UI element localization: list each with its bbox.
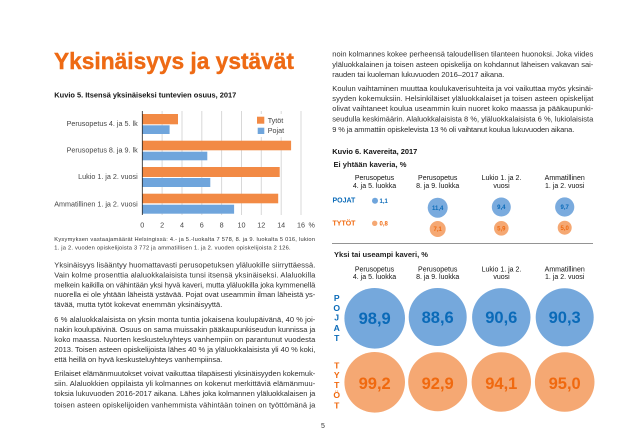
bar chart: lonely share: 4 xyxy=(180,220,184,229)
row label: boys vertical: A xyxy=(334,323,340,333)
column headers: no friends: Perusopetus xyxy=(355,175,395,182)
column headers: one or more friends: 1. ja 2. vuosi xyxy=(545,274,585,281)
row: boys, one or more friends: 98,9 xyxy=(359,310,391,328)
bar chart: lonely share: 10 xyxy=(238,220,246,229)
bar chart: lonely share xyxy=(54,111,315,229)
column headers: no friends: Lukio 1. ja 2. xyxy=(482,175,521,182)
column headers: one or more friends: Perusopetus xyxy=(418,266,458,274)
column headers: no friends: 4. ja 5. luokka xyxy=(353,183,396,190)
column headers: one or more friends: Perusopetus xyxy=(355,266,395,274)
body text: right paragraph 1: rauden tai kuoleman lukuvuoden 2016–2017 aikana. xyxy=(332,70,504,79)
row: girls, one or more friends: 92,9 xyxy=(422,375,454,393)
body text: left paragraph 3 xyxy=(54,369,316,409)
bar chart: lonely share: Lukio 1. ja 2. vuosi xyxy=(78,172,138,181)
row: girls, no friends xyxy=(332,218,572,237)
column headers: no friends xyxy=(353,175,585,190)
column headers: no friends: 1. ja 2. vuosi xyxy=(545,183,585,190)
bar chart: lonely share: Perusopetus 4. ja 5. lk xyxy=(67,119,138,128)
legend: Tytöt xyxy=(268,116,283,125)
legend xyxy=(257,116,284,135)
chart heading: Kuvio 5. Itsensä yksinäiseksi tuntevien osuus, 2017 xyxy=(54,90,236,100)
column headers: one or more friends: 8. ja 9. luokka xyxy=(416,274,459,281)
row label: girls vertical: Y xyxy=(334,370,340,380)
column headers: no friends: Perusopetus xyxy=(418,175,458,182)
row label: girls vertical: T xyxy=(334,380,340,390)
body text: left paragraph 3: Erilaiset elämänmuutokset voivat vaikuttaa tilapäisesti yksinäisyyden kokemuk- xyxy=(54,369,316,378)
row label: girls vertical: T xyxy=(334,400,340,410)
row: boys, one or more friends xyxy=(344,288,594,349)
bar chart: lonely share: 0 xyxy=(140,220,144,229)
body text: left paragraph 1: Yksinäisyys lisääntyy huomattavasti perusopetuksen yläluokille siirryttäessä. xyxy=(54,261,315,270)
figure 6 heading: Kuvio 6. Kavereita, 2017 xyxy=(332,147,417,156)
row: girls, one or more friends: 99,2 xyxy=(359,375,391,393)
body text: left paragraph 2: 6 % alaluokkalaisista on yksin monta tuntia jokaisena koulupäivänä, 40 % joi- xyxy=(54,315,316,324)
row: girls, no friends: 7,1 xyxy=(434,227,443,233)
column headers: no friends: 8. ja 9. luokka xyxy=(416,183,459,190)
column headers: one or more friends: 4. ja 5. luokka xyxy=(353,274,396,281)
body text: left paragraph 3: toisen asteen opiskelijoiden vanhemmista vähintään toinen on työttömänä ja xyxy=(54,400,316,409)
row: boys, one or more friends: 90,6 xyxy=(485,309,517,327)
row: girls, one or more friends: 94,1 xyxy=(485,375,517,393)
bar chart: lonely share: Perusopetus 8. ja 9. lk xyxy=(67,146,138,154)
bar chart: lonely share: Ammatillinen 1. ja 2. vuosi xyxy=(54,200,138,208)
chart footnote: Kysymyksen vastaajamäärät Helsingissä: 4.- ja 5.-luokalta 7 578, 8. ja 9. luokalta 5 016, lukion xyxy=(54,237,315,243)
page number: 5 xyxy=(321,423,325,430)
bar chart: lonely share: 2 xyxy=(160,220,164,229)
body text: right paragraph 1 xyxy=(332,50,594,79)
body text: left paragraph 2: että heillä on hyvä keskusteluyhteys vanhempiinsa. xyxy=(54,355,222,364)
body text: left paragraph 1 xyxy=(54,261,316,309)
body text: right paragraph 2: Koulun vaihtaminen muuttaa koulukaverisuhteita ja voi vaikuttaa myös yksinäi- xyxy=(332,84,594,93)
body text: left paragraph 1: nuorella ei ole yhtään läheistä ystävää. Pojat ovat useammin ilman läheistä ys- xyxy=(54,290,316,299)
row: girls, no friends: 5,9 xyxy=(497,226,506,232)
chart footnote xyxy=(54,237,315,252)
column headers: one or more friends: vuosi xyxy=(493,274,510,281)
body text: left paragraph 1: Vain kolme prosenttia alaluokkalaisista tunsi itsensä yksinäiseksi. Alaluokilla xyxy=(54,270,316,280)
row: girls, no friends: TYTÖT xyxy=(332,218,356,228)
body text: right paragraph 2: syyden kokemuksiin. Helsinkiläiset yläluokkalaiset ja toisen asteen opiskelijat xyxy=(332,94,594,103)
row: boys, one or more friends: 90,3 xyxy=(549,309,581,327)
row: boys, no friends: 11,4 xyxy=(432,206,444,212)
row label: girls vertical: Ö xyxy=(333,390,340,400)
subheading: one or more friends: Yksi tai useampi kaveri, % xyxy=(334,252,429,259)
body text: right paragraph 2: 9 % ja ammattiin opiskelevista 13 % oli vaihtanut koulua lukuvuoden aikana. xyxy=(332,125,574,134)
bar chart: lonely share: 6 xyxy=(200,220,204,229)
body text: right paragraph 2 xyxy=(332,84,594,134)
body text: left paragraph 2: 2013. Toisen asteen opiskelijoista lähes 40 % ja yläluokkalaisista yli 40 % koki, xyxy=(54,345,315,354)
row label: boys vertical: P xyxy=(334,293,340,303)
column headers: one or more friends: Ammatillinen xyxy=(545,266,585,274)
row label: boys vertical: T xyxy=(334,333,340,343)
legend: Pojat xyxy=(268,126,284,135)
bar chart: lonely share: 16 xyxy=(297,220,305,229)
row: boys, one or more friends: 88,6 xyxy=(422,309,454,327)
subheading: no friends: Ei yhtään kaveria, % xyxy=(334,162,407,169)
body text: left paragraph 3: toksia lukuvuoden 2016-2017 aikana. Lähes joka kolmannen yläluokkalaisen ja xyxy=(54,389,316,398)
chart footnote: 1. ja 2. vuoden opiskelijoista 3 772 ja ammatillisen 1. ja 2. vuoden opiskelijoista 2 126. xyxy=(54,246,291,252)
row: boys, no friends: POJAT xyxy=(332,198,356,204)
row label: boys vertical: J xyxy=(334,312,339,322)
body text: left paragraph 3: siin. Alaluokkien oppilaista yli kolmannes on kokenut merkittäviä elämänmuu- xyxy=(54,379,316,388)
body text: right paragraph 1: noin kolmannes kokee perheensä taloudellisen tilanteen huonoksi. Joka viides xyxy=(332,50,594,59)
bar chart: lonely share: % xyxy=(308,220,315,229)
row: boys, no friends xyxy=(332,197,574,218)
row: girls, no friends: 0,8 xyxy=(380,222,389,228)
bar chart: lonely share: 12 xyxy=(257,220,265,229)
row label: boys vertical xyxy=(333,293,340,343)
row label: boys vertical: O xyxy=(333,303,340,313)
column headers: one or more friends xyxy=(353,266,585,281)
bar chart: lonely share: 14 xyxy=(277,220,285,229)
title: Yksinäisyys ja ystävät xyxy=(54,48,294,74)
row: boys, no friends: 1,1 xyxy=(380,199,389,205)
column headers: no friends: vuosi xyxy=(493,183,510,190)
row: girls, one or more friends: 95,0 xyxy=(549,375,581,393)
body text: left paragraph 2: koko maassa. Nuorten keskusteluyhteys vanhempiin on parantunut vuodesta xyxy=(54,335,316,344)
row: boys, no friends: 9,7 xyxy=(561,205,570,211)
row label: girls vertical: T xyxy=(334,360,340,370)
body text: right paragraph 1: yläluokkalainen ja toisen asteen opiskelija on kohdannut läheisen vakavan sai- xyxy=(332,60,594,69)
row: girls, no friends: 5,0 xyxy=(561,226,570,232)
row label: girls vertical xyxy=(333,360,340,410)
body text: right paragraph 2: olivat vaihtaneet koulua useammin kuin nuoret koko maassa ja pääkaupunki- xyxy=(332,104,594,113)
body text: left paragraph 2 xyxy=(54,315,316,364)
body text: left paragraph 1: tävää, mutta tytöt kokevat enemmän yksinäisyyttä. xyxy=(54,300,222,309)
row: boys, no friends: 9,4 xyxy=(497,205,506,211)
column headers: one or more friends: Lukio 1. ja 2. xyxy=(482,266,521,274)
column headers: no friends: Ammatillinen xyxy=(545,175,585,182)
body text: left paragraph 1: melkein kaikilla on vähintään yksi hyvä kaveri, mutta yläluokilla joka kymmenellä xyxy=(54,280,316,290)
body text: left paragraph 2: nakin koulupäivinä. Osuus on sama muissakin pääkaupunkiseudun kunnissa ja xyxy=(54,325,316,334)
body text: right paragraph 2: seudulla keskimäärin. Alaluokkalaisista 8 %, yläluokkalaisista 6 %, lukiolaisista xyxy=(332,114,594,124)
bar chart: lonely share: 8 xyxy=(220,220,224,229)
row: girls, one or more friends xyxy=(344,352,594,413)
